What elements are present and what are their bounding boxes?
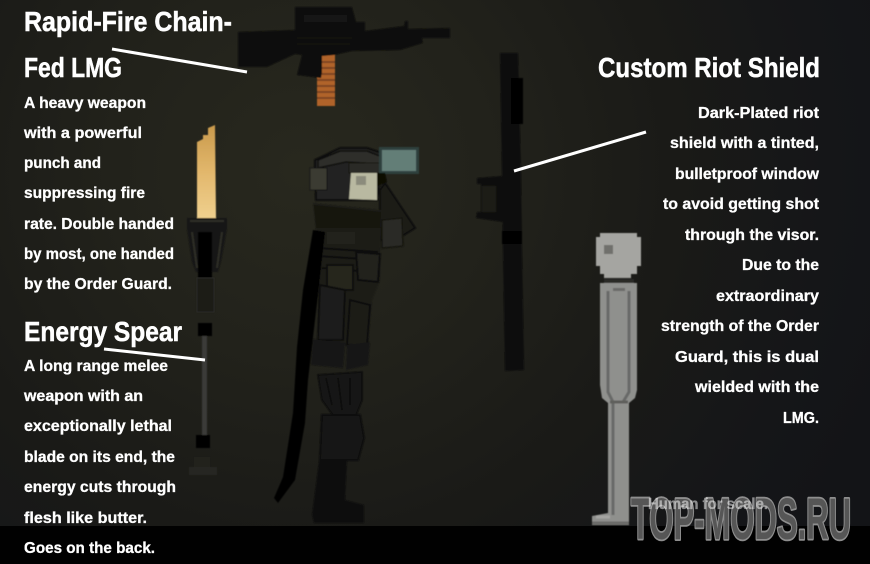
belt (311, 339, 345, 368)
text block: LMG description: by the Order Guard. (24, 276, 172, 293)
text block: shield description: extraordinary (716, 288, 819, 305)
text block: spear description (23, 358, 176, 557)
text block: shield description (661, 105, 820, 427)
lower legs (320, 415, 364, 460)
text block: shield description: shield with a tinted, (670, 135, 819, 152)
ammo belt (317, 55, 335, 106)
text block: shield description: wielded with the (694, 379, 819, 396)
pouches (318, 372, 362, 415)
text block: shield description: LMG. (783, 410, 819, 427)
text block: spear description: flesh like butter. (24, 510, 147, 527)
arrow: spear pointer (104, 349, 205, 360)
raised arm (380, 183, 415, 240)
icon: energy spear (187, 125, 227, 475)
heading: Rapid-Fire Chain-Fed LMG (24, 6, 232, 83)
text block: spear description: blade on its end, the (24, 449, 175, 466)
text block: shield description: Dark-Plated riot (698, 105, 820, 122)
visor (379, 147, 419, 174)
heading: Rapid-Fire Chain-Fed LMG: Rapid-Fire Chain- (24, 6, 232, 37)
text block: spear description: energy cuts through (24, 479, 176, 496)
text block: LMG description (23, 95, 174, 293)
text block: shield description: to avoid getting shot (663, 196, 820, 213)
heading: Energy Spear: Energy Spear (24, 316, 182, 347)
blade (197, 125, 216, 218)
heading: Custom Riot Shield: Custom Riot Shield (598, 52, 820, 83)
text block: shield description: through the visor. (685, 227, 819, 244)
text block: spear description: weapon with an (23, 388, 143, 405)
text block: spear description: exceptionally lethal (24, 418, 172, 435)
text block: shield description: Guard, this is dual (675, 349, 819, 366)
torso (313, 203, 381, 345)
text block: spear description: Goes on the back. (24, 540, 155, 557)
text block: LMG description: with a powerful (23, 125, 142, 142)
icon: riot shield (476, 53, 524, 371)
boot (312, 461, 364, 523)
chin strap (377, 173, 387, 186)
upper legs (318, 285, 345, 340)
arrow: shield pointer (514, 132, 646, 171)
arrow: LMG pointer (112, 49, 247, 72)
icon: soldier (274, 147, 419, 523)
text block: LMG description: punch and (24, 155, 101, 172)
text block: shield description: strength of the Order (661, 318, 819, 335)
text block: shield description: bulletproof window (675, 166, 820, 183)
text block: LMG description: rate. Double handed (24, 216, 174, 233)
text block: human for scale: Human for scale. (648, 496, 768, 513)
heading: Rapid-Fire Chain-Fed LMG: Fed LMG (24, 52, 122, 83)
text block: LMG description: suppressing fire (24, 185, 145, 202)
face (349, 173, 377, 200)
text block: LMG description: A heavy weapon (24, 95, 146, 112)
icon: chain-fed LMG (238, 7, 450, 106)
bottom black bar (0, 526, 870, 564)
text block: spear description: A long range melee (24, 358, 168, 375)
text block: shield description: Due to the (742, 257, 819, 274)
back-mounted sword (274, 230, 325, 503)
text block: LMG description: by most, one handed (24, 246, 174, 263)
helmet (315, 148, 382, 200)
icon: human for scale (592, 233, 641, 525)
